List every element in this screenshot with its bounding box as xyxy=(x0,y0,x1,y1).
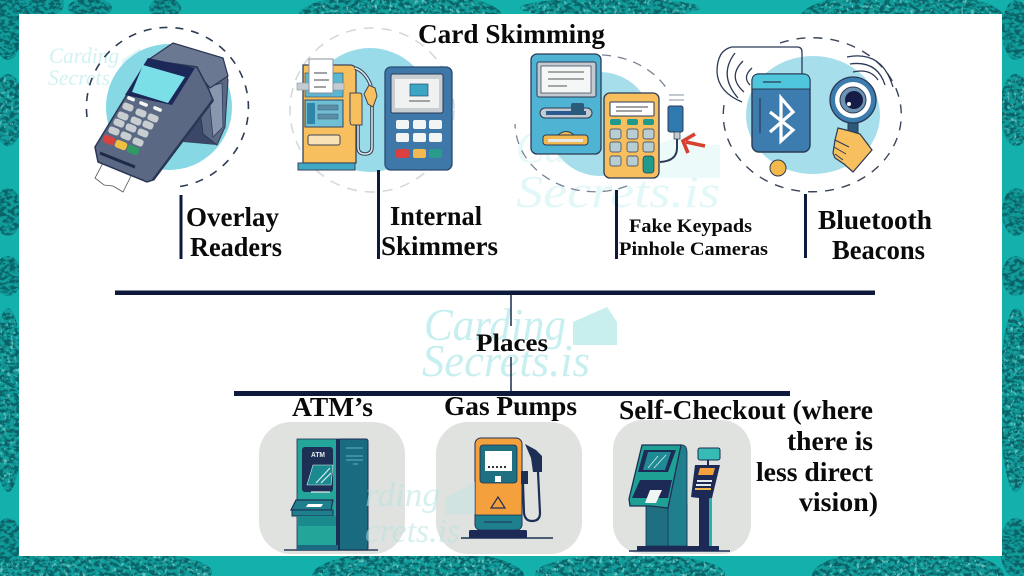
title: Card Skimming xyxy=(418,19,605,49)
label: Bluetooth Beacons: Bluetooth xyxy=(818,205,932,235)
place: ATM: ATM’s xyxy=(292,392,373,422)
connector line xyxy=(510,295,512,392)
label: Internal Skimmers: Skimmers xyxy=(381,231,498,261)
label: Fake Keypads and Pinhole Cameras: Fake Keypads xyxy=(629,216,752,237)
place: Self-Checkout xyxy=(613,395,878,554)
place: Self-Checkout: Self-Checkout (where xyxy=(619,395,873,425)
heading: Places: Places xyxy=(476,330,548,357)
place: Self-Checkout: there is xyxy=(787,426,873,456)
label: Bluetooth Beacons xyxy=(804,194,932,265)
label: Internal Skimmers xyxy=(377,170,498,261)
icon: fake keypad and pinhole camera xyxy=(515,54,705,192)
watermark: bottom: rding xyxy=(365,477,440,514)
place: ATM xyxy=(259,392,405,554)
label: Overlay Readers: Overlay xyxy=(186,202,279,232)
place: Gas Pumps xyxy=(436,391,582,554)
watermark: top left: Secrets.is xyxy=(48,65,130,90)
label: Overlay Readers xyxy=(180,195,282,262)
place: ATM: ATM xyxy=(311,452,325,459)
watermark: middle right: Secrets.is xyxy=(516,166,720,217)
icon: fuel pump and internal skimmer keypad xyxy=(290,28,454,192)
watermark: middle right xyxy=(516,123,720,217)
place: Self-Checkout: less direct xyxy=(756,457,873,487)
watermark: top left xyxy=(48,43,146,90)
places horizontal divider xyxy=(234,391,790,396)
icon: Bluetooth beacon and magnifier xyxy=(717,38,901,192)
watermark: bottom xyxy=(365,477,475,550)
main horizontal divider xyxy=(115,290,875,295)
watermark: middle right: Carding xyxy=(516,123,656,172)
watermark: bottom: crets.is xyxy=(365,513,460,550)
place: Self-Checkout: vision) xyxy=(799,487,878,517)
label: Overlay Readers: Readers xyxy=(190,232,282,262)
label: Fake Keypads and Pinhole Cameras: Pinhole Cameras xyxy=(619,239,768,260)
label: Fake Keypads and Pinhole Cameras xyxy=(615,190,768,260)
place: Gas Pumps: Gas Pumps xyxy=(444,391,577,421)
watermark: top left: Carding xyxy=(49,43,119,68)
icon: POS overlay reader with dashed circle xyxy=(86,27,248,192)
watermark: centre xyxy=(422,299,617,386)
watermark: centre: Carding xyxy=(424,299,566,350)
label: Internal Skimmers: Internal xyxy=(390,201,482,231)
watermark: centre: Secrets.is xyxy=(422,335,590,386)
label: Bluetooth Beacons: Beacons xyxy=(832,235,925,265)
